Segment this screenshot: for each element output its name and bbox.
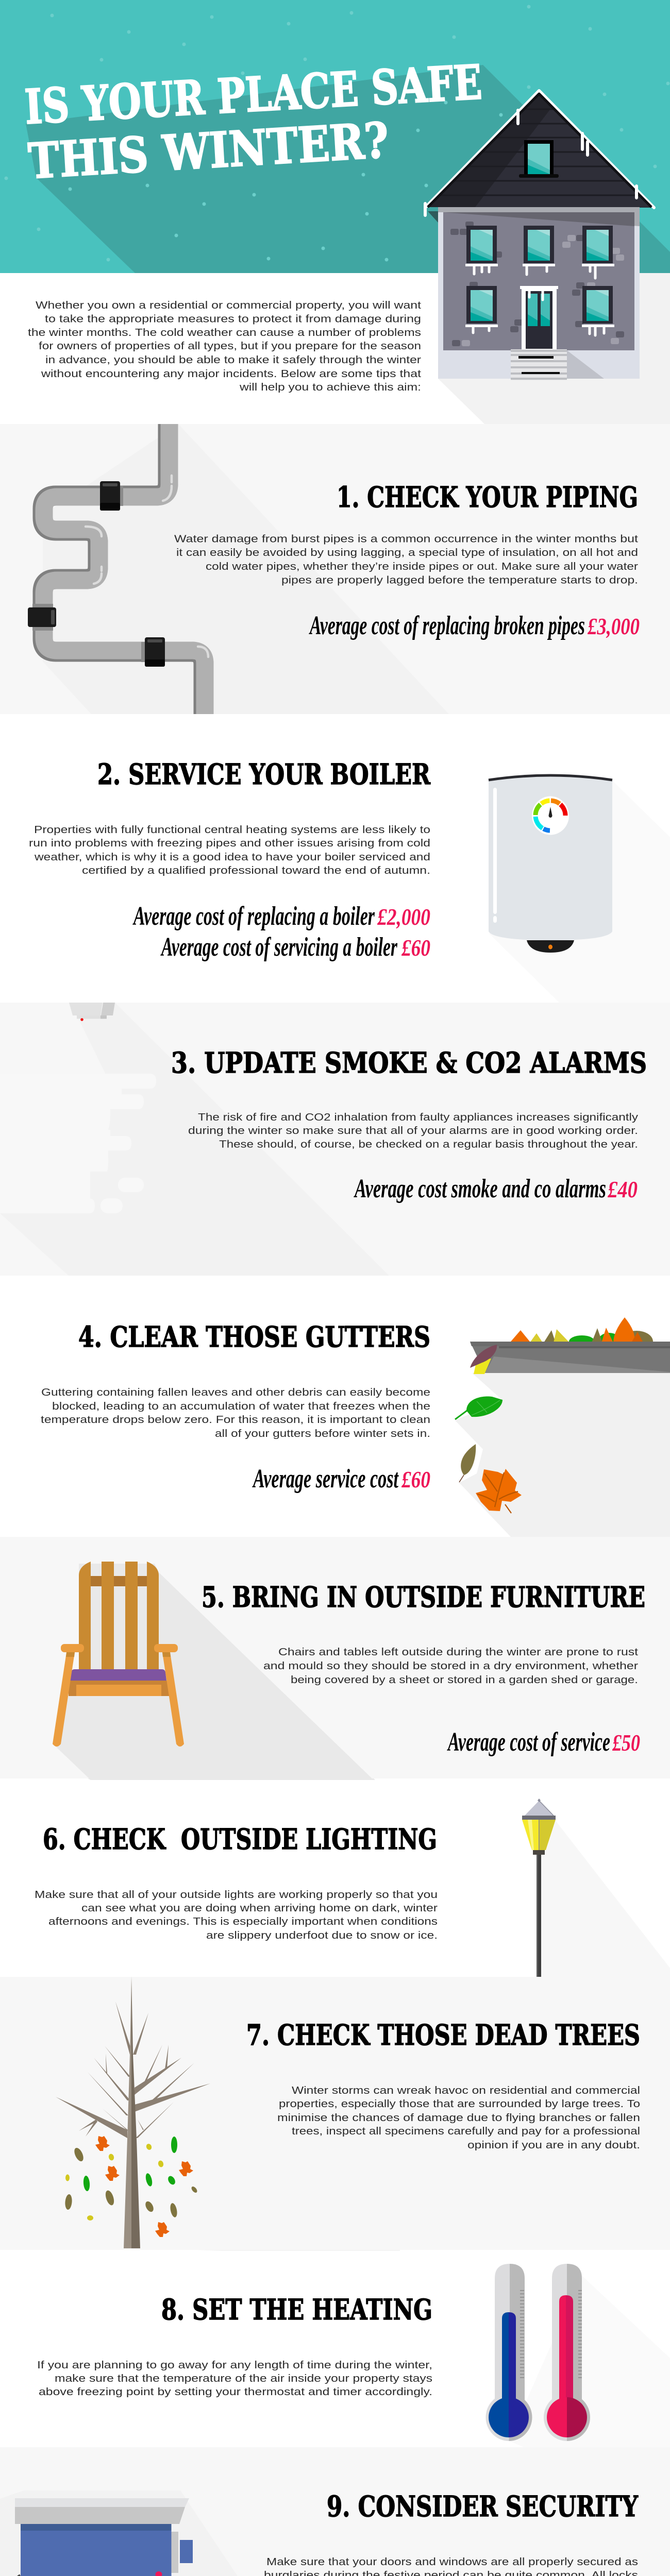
body text: Guttering containing fallen leaves and other debris can easily become bbox=[41, 1386, 430, 1398]
panel: 8 set the heating bbox=[0, 2250, 670, 2447]
icon: gutter bbox=[470, 1342, 670, 1374]
intro text: to take the appropriate measures to protect it from damage during bbox=[45, 313, 421, 325]
body text: Water damage from burst pipes is a common occurrence in the winter months but bbox=[174, 533, 638, 545]
body text: opinion if you are in any doubt. bbox=[467, 2139, 640, 2151]
body text: trees, inspect all specimens carefully and pay for a professional bbox=[292, 2125, 640, 2137]
heading: 4. CLEAR THOSE GUTTERS bbox=[78, 1320, 430, 1353]
lamp shadow bbox=[541, 1821, 670, 1977]
main title: IS YOUR PLACE SAFE bbox=[23, 54, 483, 135]
cost: Average service cost bbox=[252, 1464, 399, 1494]
body text: during the winter so make sure that all of your alarms are in good working order. bbox=[188, 1125, 638, 1137]
leaves in gutter bbox=[511, 1317, 653, 1352]
thermometer shadow bbox=[509, 2276, 670, 2447]
chair shadow bbox=[56, 1564, 374, 1780]
icon: cold thermometer bbox=[485, 2264, 532, 2441]
cost: £40 bbox=[607, 1176, 638, 1202]
front door bbox=[520, 286, 558, 349]
body text: Winter storms can wreak havoc on residential and commercial bbox=[292, 2084, 640, 2096]
panel: 9 consider security bbox=[0, 2447, 670, 2576]
body text: Chairs and tables left outside during the winter are prone to rust bbox=[278, 1646, 638, 1658]
intro text: the winter months. The cold weather can cause a number of problems bbox=[28, 327, 421, 338]
main title: THIS WINTER? bbox=[27, 112, 390, 190]
body text: it can easily be avoided by using lagging, a special type of insulation, on all hot and bbox=[176, 547, 638, 558]
icon: security camera bbox=[0, 2498, 193, 2576]
camera shadow bbox=[0, 2490, 315, 2576]
body text: afternoons and evenings. This is especially important when conditions bbox=[48, 1916, 438, 1927]
costs: Average cost of replacing a boiler bbox=[132, 902, 375, 931]
body text: These should, of course, be checked on a regular basis throughout the year. bbox=[219, 1139, 638, 1150]
body text: run into problems with freezing pipes and other issues arising from cold bbox=[29, 837, 430, 849]
costs: £2,000 bbox=[377, 904, 430, 930]
cost: £50 bbox=[612, 1730, 640, 1756]
body text bbox=[188, 1111, 639, 1150]
intro text: Whether you own a residential or commercial property, you will want bbox=[36, 299, 421, 311]
body text: temperature drops below zero. For this reason, it is important to clean bbox=[41, 1414, 430, 1426]
icon: hot thermometer bbox=[544, 2264, 590, 2441]
intro text: without encountering any major incidents. Below are some tips that bbox=[41, 368, 421, 380]
body text: and mould so they should be stored in a dry environment, whether bbox=[263, 1660, 638, 1672]
illustration: house bbox=[425, 91, 654, 380]
intro text: in advance, you should be able to make it safely through the winter bbox=[45, 354, 421, 366]
body text: weather, which is why it is a good idea to have your boiler serviced and bbox=[34, 851, 430, 863]
body text: Make sure that your doors and windows are all properly secured as bbox=[266, 2556, 638, 2568]
icicles bbox=[425, 110, 636, 335]
house ground shadow bbox=[438, 273, 670, 424]
branches bbox=[56, 2002, 210, 2138]
body text: pipes are properly lagged before the temperature starts to drop. bbox=[281, 574, 638, 586]
costs bbox=[132, 902, 430, 962]
icon: smoke alarm bbox=[69, 1003, 115, 1021]
title long shadow bbox=[26, 65, 670, 273]
body text: being covered by a sheet or stored in a garden shed or garage. bbox=[291, 1674, 638, 1686]
panel: header bbox=[0, 0, 670, 273]
heading: 2. SERVICE YOUR BOILER bbox=[97, 757, 431, 791]
costs: £60 bbox=[401, 935, 430, 961]
panel: 1 check your piping bbox=[0, 424, 670, 714]
body text: minimise the chances of damage due to flying branches or fallen bbox=[277, 2112, 640, 2124]
panel: 6 check outside lighting bbox=[0, 1778, 670, 1977]
panel: 4 clear those gutters bbox=[0, 1276, 670, 1537]
roof bbox=[425, 91, 654, 208]
body text bbox=[41, 1386, 430, 1439]
heading: 8. SET THE HEATING bbox=[161, 2293, 432, 2326]
main title bbox=[23, 54, 483, 190]
body text bbox=[277, 2084, 640, 2151]
costs: Average cost of servicing a boiler bbox=[160, 933, 397, 962]
icon: pipes bbox=[28, 424, 208, 714]
windows bbox=[465, 226, 614, 327]
falling leaves bbox=[455, 1396, 522, 1513]
body text bbox=[264, 2556, 638, 2576]
heading: 6. CHECK OUTSIDE LIGHTING bbox=[43, 1822, 437, 1856]
body text: properties, especially those that are surrounded by large trees. To bbox=[279, 2098, 640, 2110]
body text: are slippery underfoot due to snow or ice. bbox=[206, 1929, 438, 1941]
body text: can see what you are doing when arriving home on dark, winter bbox=[81, 1902, 438, 1914]
panel: 3 update smoke and co2 alarms bbox=[0, 1003, 670, 1276]
falling tree leaves bbox=[64, 2136, 198, 2237]
body text: certified by a qualified professional toward the end of autumn. bbox=[82, 865, 430, 876]
alarm shadow bbox=[0, 1003, 389, 1276]
gutter shadow bbox=[455, 1373, 670, 1537]
body text: above freezing point by setting your thermostat and timer accordingly. bbox=[39, 2386, 432, 2398]
body text: all of your gutters before winter sets in. bbox=[215, 1428, 430, 1439]
icon: gauge bbox=[532, 796, 569, 835]
body text bbox=[37, 2359, 432, 2398]
panel: 2 service your boiler bbox=[0, 714, 670, 1003]
panel: 7 check those dead trees bbox=[0, 1976, 670, 2250]
intro text bbox=[28, 299, 421, 393]
cost: £3,000 bbox=[587, 613, 640, 639]
body text: Make sure that all of your outside lights are working properly so that you bbox=[35, 1889, 438, 1901]
panel: 5 bring in outside furniture bbox=[0, 1537, 670, 1780]
body text bbox=[263, 1646, 638, 1686]
intro text: for owners of properties of all types, but if you prepare for the season bbox=[39, 340, 421, 352]
snowflakes bbox=[4, 5, 670, 262]
body text: If you are planning to go away for any length of time during the winter, bbox=[37, 2359, 432, 2371]
body text: make sure that the temperature of the air inside your property stays bbox=[55, 2372, 432, 2384]
icon: boiler bbox=[489, 775, 612, 953]
icon: street lamp bbox=[522, 1799, 556, 1977]
body text bbox=[35, 1889, 438, 1941]
body text: Properties with fully functional central heating systems are less likely to bbox=[34, 824, 430, 836]
body text: blocked, leading to an accumulation of water that freezes when the bbox=[52, 1400, 430, 1412]
boiler shadow bbox=[489, 781, 670, 1003]
dormer window bbox=[519, 140, 559, 178]
body text bbox=[174, 533, 638, 586]
smoke bbox=[0, 1074, 156, 1213]
body text: cold water pipes, whether they’re inside pipes or out. Make sure all your water bbox=[206, 561, 638, 572]
building walls bbox=[438, 207, 640, 379]
icon: chair bbox=[53, 1562, 184, 1747]
panel: intro bbox=[0, 273, 670, 424]
pipe shadow bbox=[43, 424, 449, 714]
intro text: will help you to achieve this aim: bbox=[239, 381, 421, 393]
front steps bbox=[511, 349, 604, 380]
icon: tree bbox=[56, 1976, 210, 2248]
cost: £60 bbox=[401, 1466, 430, 1493]
body text bbox=[29, 824, 430, 876]
bricks bbox=[450, 222, 624, 346]
body text: The risk of fire and CO2 inhalation from faulty appliances increases significantly bbox=[198, 1111, 639, 1123]
